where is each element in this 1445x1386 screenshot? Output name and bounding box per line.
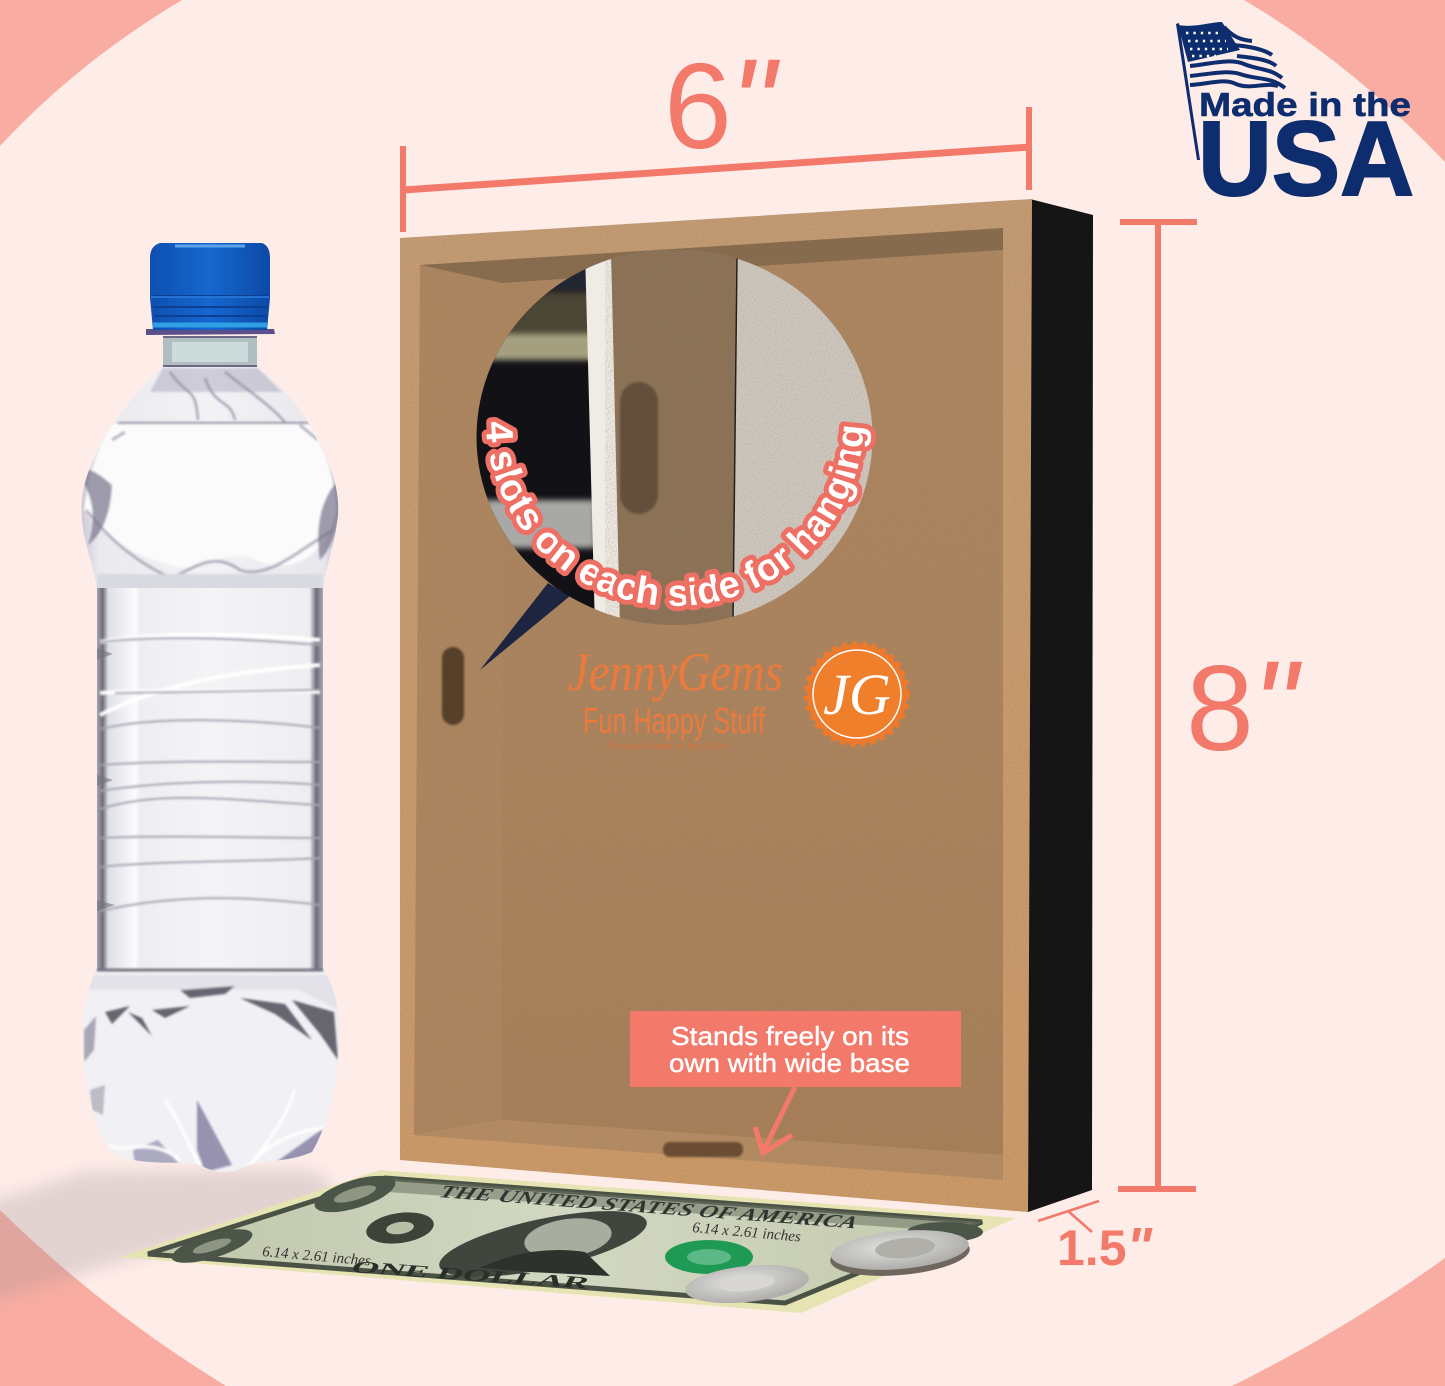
wood grain — [400, 199, 1032, 1212]
brand note: Proudly Made in the USA — [607, 741, 727, 751]
arrow to base slot — [755, 1087, 795, 1153]
white edge — [585, 250, 622, 628]
made in the USA badge — [1176, 22, 1414, 218]
water bottle — [80, 243, 342, 1176]
curved label: 4 slots on each side for hanging — [482, 417, 876, 612]
flag canton — [1178, 22, 1240, 62]
USA: USA — [1198, 100, 1414, 218]
coin dime — [683, 1260, 811, 1308]
back wall — [502, 250, 1003, 1155]
raw edge — [733, 250, 875, 628]
corner ornaments — [168, 1168, 983, 1270]
serif heading on bill: THE UNITED STATES OF AMERICA — [436, 1182, 862, 1233]
dimension: height: 8" — [1186, 635, 1303, 778]
top inner wall shadow — [420, 228, 1003, 283]
shadow box — [400, 199, 1093, 1212]
slot in board — [620, 382, 658, 514]
bottom inner wall — [414, 1120, 1003, 1180]
size note right: 6.14 x 2.61 inches — [692, 1220, 802, 1245]
coin quarter — [829, 1225, 971, 1281]
neck — [163, 336, 257, 366]
portrait — [434, 1198, 652, 1290]
cap — [150, 243, 270, 330]
zoom callout circle — [470, 245, 875, 630]
callout: stands freely: Stands freely on its — [671, 1021, 909, 1051]
callout: stands freely: own with wide base — [669, 1048, 910, 1078]
brand wordmark — [568, 642, 783, 751]
flag stripes — [1190, 27, 1285, 88]
bill print — [148, 1178, 982, 1303]
bill border — [148, 1178, 982, 1303]
black side panel — [1028, 199, 1093, 1212]
bill paper — [120, 1170, 1016, 1313]
dollar bill — [120, 1168, 1016, 1313]
front frame — [400, 199, 1032, 1212]
size note left: 6.14 x 2.61 inches — [262, 1244, 372, 1269]
brand badge: JG — [823, 662, 891, 727]
callout: stands freely — [630, 1011, 961, 1087]
made in the: Made in the — [1199, 86, 1411, 123]
bill value: ONE DOLLAR — [347, 1257, 597, 1292]
dimension: height — [1118, 222, 1303, 1190]
dimension: depth — [1038, 1201, 1154, 1277]
brand badge — [807, 644, 907, 744]
top engraved strip — [360, 1178, 982, 1232]
shoulder water highlights — [82, 368, 340, 590]
left wall slot — [442, 647, 464, 725]
left inner wall — [414, 265, 502, 1135]
brand name: JennyGems — [568, 642, 783, 702]
bottle shadow — [0, 1170, 332, 1305]
board face — [611, 250, 737, 628]
serial seal — [364, 1208, 436, 1248]
dimension: width — [403, 33, 1030, 232]
flag pole — [1176, 23, 1200, 160]
dimension: depth: 1.5" — [1057, 1217, 1154, 1277]
green seal — [665, 1240, 753, 1274]
flag stars — [1186, 33, 1228, 56]
dimension: width: 6" — [664, 33, 781, 176]
dark background — [476, 262, 600, 612]
bottom slot — [663, 1142, 743, 1157]
dividing line — [733, 255, 737, 620]
ribs — [100, 635, 320, 911]
zoom callout tail — [480, 583, 570, 670]
flag — [1178, 22, 1285, 88]
cap flange — [146, 329, 275, 335]
bottle body — [80, 336, 342, 1176]
brand tagline: Fun Happy Stuff — [583, 700, 766, 741]
base folds — [83, 972, 339, 1138]
ribbed middle band — [97, 588, 323, 970]
